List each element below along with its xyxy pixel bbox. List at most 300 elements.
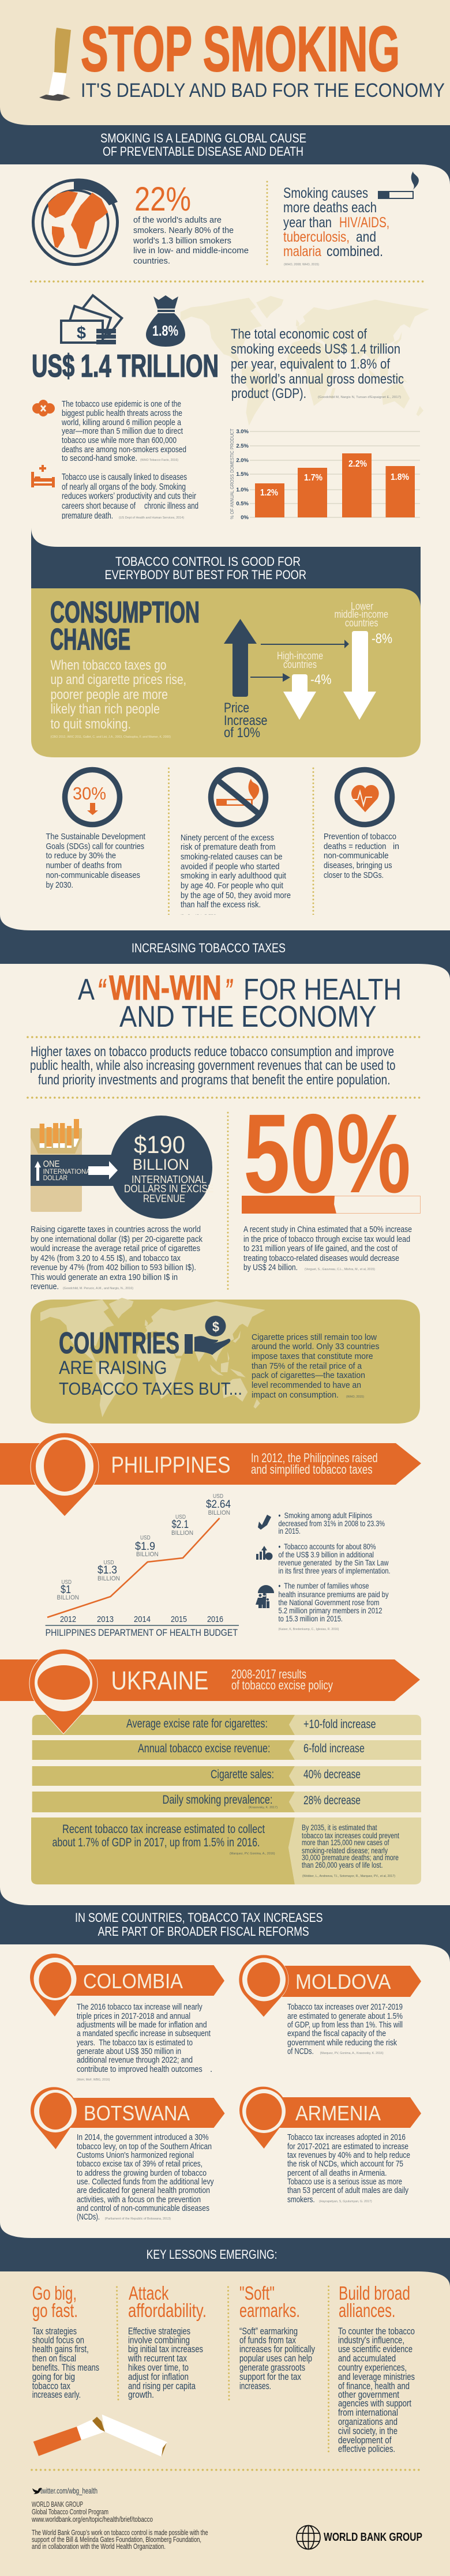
header panel — [0, 0, 450, 231]
lesson: build broad alliances: development of — [338, 2435, 392, 2446]
text block: total economic cost: product (GDP). — [231, 386, 306, 401]
icon: hand with coin: $ — [212, 1319, 220, 1335]
ribbon: botswana — [31, 2087, 224, 2149]
text: botswana: activities, with a focus on the prevention — [77, 2195, 201, 2205]
arrow: high income drop — [283, 674, 316, 720]
stat: 22 percent: 22% — [134, 181, 191, 218]
row: excise rate: +10-fold increase — [303, 1718, 376, 1731]
lesson: go big go fast: tobacco tax — [32, 2381, 71, 2391]
row: excise rate — [32, 1715, 421, 1735]
lesson: attack affordability: involve combining — [128, 2335, 190, 2345]
$190 billion label: INTERNATIONAL — [132, 1174, 207, 1185]
logo: world bank group: WORLD BANK GROUP — [324, 2531, 422, 2544]
text: ninety percent: smoking-related causes can be — [181, 852, 283, 862]
icon: broken cigarette — [33, 2414, 167, 2457]
text block: diseases: reduces workers’ productivity and cuts their — [62, 491, 197, 501]
progress bar: 50 percent — [242, 1196, 420, 1214]
row: gdp and estimates: Recent tobacco tax increase estimated to collect — [62, 1823, 265, 1836]
banner: broader fiscal reforms — [0, 1887, 450, 1962]
years axis: 2015 — [171, 1614, 187, 1624]
label 2013: BILLION — [97, 1575, 120, 1582]
body text: than 75% of the retail price of a — [252, 1361, 362, 1371]
body text: to quit smoking. — [51, 716, 131, 732]
text: moldova: government while reducing the risk — [287, 2038, 397, 2048]
label 2016: BILLION — [208, 1509, 230, 1516]
lesson: attack affordability — [127, 2282, 207, 2400]
one international dollar: DOLLAR — [43, 1174, 68, 1182]
lesson: attack affordability: Attack — [129, 2282, 169, 2304]
banner: key lessons — [0, 2222, 450, 2576]
lesson: attack affordability: big initial tax increases — [128, 2344, 203, 2355]
text: ninety percent: by the age of 50, they avoid more — [181, 891, 291, 900]
text: botswana: Customs Union's harmonized regional — [77, 2150, 194, 2160]
ribbon: moldova — [239, 1955, 421, 2017]
label: -4%: -4% — [310, 672, 331, 688]
lesson: go big go fast: then on fiscal — [32, 2353, 76, 2364]
text: china study: (Verguet, S., Gauvreau, C.L., Mishra, M., et al, 2015) — [305, 1268, 375, 1271]
text: prevention: in — [393, 842, 399, 851]
text: ninety percent: Ninety percent of the excess — [181, 833, 274, 843]
text block: adult smokers: of the world's adults are — [133, 215, 222, 225]
text: colombia — [77, 2002, 212, 2082]
subheading — [59, 1357, 242, 1399]
lesson: attack affordability: with recurrent tax — [127, 2353, 187, 2364]
arrow: to lower middle income — [261, 640, 349, 648]
lesson: go big go fast — [32, 2282, 99, 2400]
icon: growth chart with coin — [256, 1546, 272, 1560]
icon: cigarette butt — [39, 28, 71, 101]
icon: family under umbrella — [256, 1585, 274, 1608]
ribbon: armenia: ARMENIA — [295, 2101, 381, 2125]
text: tobacco accounts: in its first three years of implementation. — [278, 1567, 390, 1575]
lesson: go big go fast: Go big, — [32, 2282, 77, 2304]
bar low income — [255, 483, 284, 517]
text: prevention: deaths = reduction — [324, 842, 387, 851]
text: armenia: tax revenues by 40% and to help reduce — [287, 2150, 410, 2160]
text block: total economic cost: smoking exceeds US$ 1.4 trillion — [231, 341, 400, 357]
text: colombia: (MoH, MoF, WBG, 2016) — [77, 2078, 110, 2082]
icon: hand with cigarette — [258, 1515, 271, 1530]
text: armenia: (Hayrapetyan, S, Gyulumyan, G. 2017) — [319, 2200, 372, 2203]
text: tobacco accounts: • Tobacco accounts for about 80% — [278, 1542, 376, 1551]
text: tobacco accounts — [278, 1542, 390, 1575]
text: ninety percent: avoided if people who started — [181, 862, 279, 872]
text block: epidemic: tobacco use while more than 600,000 — [62, 435, 177, 445]
icon: money bills — [61, 295, 122, 344]
heading: COUNTRIES — [59, 1327, 179, 1360]
banner: key lessons: KEY LESSONS EMERGING: — [147, 2247, 277, 2262]
lesson: go big go fast: increases early. — [32, 2390, 81, 2400]
lesson: soft earmarks — [239, 2282, 316, 2391]
category labels: Low-Income — [255, 521, 284, 528]
heading — [105, 554, 306, 582]
text: colombia: The 2016 tobacco tax increase will nearly — [77, 2002, 202, 2012]
pin — [31, 2087, 77, 2149]
category labels: Countries — [298, 532, 321, 539]
label 2015: $2.1 — [172, 1519, 189, 1531]
label 2013 — [97, 1560, 120, 1582]
years axis — [60, 1614, 223, 1624]
lesson: soft earmarks: generate grassroots — [239, 2363, 305, 2373]
text block: epidemic: to second-hand smoke. — [62, 453, 137, 463]
bar lower middle income — [298, 468, 327, 517]
body text: pack of cigarettes—the taxation — [252, 1370, 365, 1380]
text: raising cigarette taxes — [30, 1225, 202, 1291]
arrow — [88, 1161, 118, 1180]
icon: cigarette pack with $190 billion — [31, 1116, 213, 1219]
text: organisation address — [31, 2500, 153, 2524]
label 2013: USD — [104, 1560, 114, 1566]
text: acknowledgement: The World Bank Group’s work on tobacco control is made possible with the — [32, 2529, 208, 2537]
text: prevention — [324, 832, 399, 880]
text: acknowledgement: and in collaboration with the World Health Organization. — [32, 2543, 166, 2551]
bar low income: 1.2% — [260, 488, 278, 498]
text: colombia: years. The tobacco tax is estimated to — [77, 2038, 193, 2048]
text block: diseases: chronic illness and — [144, 501, 198, 511]
body text: When tobacco taxes go — [51, 658, 166, 673]
icon: money bag 1.8%: 1.8% — [152, 323, 178, 339]
ribbon: colombia: COLOMBIA — [83, 1969, 183, 1993]
background world map — [181, 296, 429, 426]
text: armenia: for 2017-2021 are estimated to increase — [287, 2142, 408, 2151]
label 2015: USD — [175, 1514, 186, 1520]
lesson: soft earmarks: of funds from tax — [239, 2335, 297, 2345]
label 2014 — [135, 1535, 159, 1558]
text: higher taxes — [30, 1044, 396, 1088]
text: organisation address: WORLD BANK GROUP — [32, 2500, 83, 2509]
text: moldova — [287, 2002, 403, 2056]
lesson: build broad alliances: use scientific evidence — [338, 2344, 412, 2355]
section heading: leading global cause — [100, 131, 306, 159]
body text: Cigarette prices still remain too low — [252, 1332, 377, 1342]
text: china study: in the price of tobacco through excise tax would lead — [243, 1234, 410, 1244]
icon: heart circle — [337, 769, 392, 825]
heading — [50, 596, 200, 656]
label: lower middle income countries: middle-income — [335, 609, 388, 620]
text block: epidemic: year—more than 5 million due to direct — [62, 426, 183, 436]
row: excise rate: Average excise rate for cigarettes: — [126, 1717, 268, 1730]
text: armenia: the risk of NCDs, which account for 75 — [287, 2159, 403, 2169]
text: sustainable development goals: number of deaths from — [46, 861, 122, 870]
text: acknowledgement — [32, 2529, 208, 2551]
text block: adult smokers: smokers. Nearly 80% of the — [133, 226, 234, 235]
row: gdp and estimates: more than 125,000 new cases of — [302, 1838, 389, 1847]
category labels: High-Income — [342, 522, 373, 529]
text: health insurance: the National Government rose from — [278, 1598, 380, 1607]
text block: total economic cost: per year, equivalent to 1.8% of — [231, 356, 390, 372]
text: armenia: smokers. — [287, 2195, 315, 2205]
lesson: go big go fast: go fast. — [32, 2300, 78, 2321]
row: gdp and estimates: tobacco tax increases could prevent — [302, 1831, 399, 1840]
lesson: attack affordability: adjust for inflation — [128, 2372, 189, 2382]
text block: more deaths: year than — [283, 215, 332, 231]
$190 billion label: REVENUE — [143, 1193, 185, 1204]
text block: adult smokers: world's 1.3 billion smokers — [133, 236, 231, 246]
text: colombia: generate about US$ 350 million in — [77, 2046, 181, 2056]
lesson: soft earmarks: support for the tax — [239, 2372, 302, 2382]
icon: hospital bed — [31, 465, 55, 487]
icon: cloud with x — [32, 400, 55, 416]
text: botswana: use. Collected funds from the additional levy — [77, 2177, 214, 2187]
text: prevention: non-communicable — [324, 851, 389, 861]
$190 billion label: DOLLARS IN EXCISE — [124, 1183, 213, 1195]
lesson: soft earmarks: “Soft” earmarking — [239, 2326, 298, 2337]
source: (WHO, 2008; WHO, 2015) — [284, 263, 319, 266]
text: sustainable development goals: by 2030. — [46, 880, 73, 890]
text block: more deaths: Smoking causes — [283, 185, 368, 201]
text: ninety percent: than half the excess risk. — [181, 900, 261, 910]
row: gdp and estimates: smoking-related disease; nearly — [302, 1846, 388, 1855]
text block: diseases: (US Dept of Health and Human Services, 2014) — [119, 516, 184, 520]
category labels: World — [393, 521, 407, 528]
row: prevalence — [32, 1792, 421, 1812]
arrow: price up — [224, 619, 257, 697]
lesson: build broad alliances: agencies with support — [338, 2398, 411, 2409]
text: sustainable development goals: to reduce by 30% the — [46, 851, 116, 861]
row: gdp and estimates: (Marquez, PV, Gonima, A., 2016) — [230, 1852, 275, 1856]
price increase label: Price — [224, 700, 249, 716]
body text: (CBO 2012, IARC 2011, Gallet, C. and List, J.A., 2003, Chaloupka, F. and Warner, K. 2000) — [51, 735, 171, 739]
body text: (WHO, 2015) — [346, 1395, 364, 1399]
lesson: build broad alliances: other government — [338, 2390, 399, 2400]
price increase label — [224, 700, 268, 741]
label: lower middle income countries — [335, 600, 388, 629]
text block: adult smokers — [133, 215, 249, 266]
$190 billion label: BILLION — [133, 1156, 189, 1173]
text: botswana: and control of non-communicable diseases — [77, 2203, 209, 2213]
stat: US$ 1.4 trillion: US$ 1.4 TRILLION — [32, 348, 219, 384]
text: ninety percent: smoking in early adulthood quit — [181, 871, 287, 881]
label: lower middle income countries: Lower — [351, 600, 373, 612]
category labels: Countries — [342, 527, 366, 534]
text block: more deaths: and — [356, 229, 376, 245]
label 2014: $1.9 — [135, 1541, 155, 1553]
row: gdp and estimates: about 1.7% of GDP in 2017, up from 1.5% in 2016. — [52, 1836, 260, 1849]
bar world — [385, 466, 415, 517]
label 2012: BILLION — [57, 1594, 79, 1601]
heading: win-win: WIN-WIN — [109, 968, 222, 1007]
panel: tobacco control banner — [31, 519, 421, 609]
icon: money bills: $ — [77, 324, 86, 343]
text block: diseases — [62, 472, 198, 521]
ribbon: philippines — [0, 1433, 421, 1516]
text: raising cigarette taxes: revenue by 47% (from 402 billion to 593 billion I$). — [31, 1263, 196, 1272]
text: ninety percent — [181, 833, 291, 918]
one international dollar: INTERNATIONAL — [43, 1167, 94, 1176]
subheading — [231, 1667, 333, 1692]
section heading: leading global cause: SMOKING IS A LEADING GLOBAL CAUSE — [100, 131, 306, 145]
text: moldova: expand the fiscal capacity of the — [287, 2029, 386, 2038]
text: health insurance: to 15.3 million in 2015. — [278, 1614, 343, 1623]
heading: win-win: “ — [97, 973, 107, 1007]
lesson: soft earmarks: increases. — [239, 2381, 271, 2391]
years axis: 2013 — [97, 1614, 114, 1624]
lesson: build broad alliances: and accumulated — [338, 2353, 396, 2364]
text: prevention: diseases, bringing us — [324, 861, 392, 870]
lesson: build broad alliances: from international — [338, 2408, 398, 2418]
subheading: In 2012, the Philippines raised — [251, 1451, 378, 1465]
icon: cigarette with smoke — [378, 171, 419, 199]
text block: total economic cost: the world’s annual gross domestic — [231, 371, 404, 387]
heading: TOBACCO CONTROL IS GOOD FOR — [115, 554, 301, 569]
bar chart: cost as percent of GDP — [230, 429, 420, 539]
lesson: build broad alliances: country experiences, — [338, 2363, 407, 2373]
text block: more deaths: combined. — [327, 243, 383, 260]
text: twitter link: twitter.com/wbg_health — [40, 2486, 97, 2495]
lesson: build broad alliances: alliances. — [339, 2300, 396, 2321]
text: ninety percent: risk of premature death from — [181, 842, 276, 852]
body text — [51, 658, 186, 739]
label 2014: BILLION — [136, 1551, 159, 1558]
label: high income countries: countries — [283, 659, 317, 670]
text: botswana — [77, 2132, 214, 2222]
panel: countries raising taxes — [31, 1298, 420, 1424]
row: excise revenue: Annual tobacco excise revenue: — [138, 1742, 270, 1755]
row: gdp and estimates — [31, 1818, 421, 1884]
ribbon: ukraine — [0, 1659, 420, 1701]
text: smoking among filipinos: decreased from 31% in 2008 to 23.3% — [278, 1519, 385, 1528]
text: organisation address: www.worldbank.org/en/topic/health/brief/tobacco — [31, 2515, 153, 2524]
text: botswana: tobacco levy, on top of the Southern African — [77, 2142, 212, 2151]
lesson: build broad alliances: effective policies. — [338, 2444, 395, 2454]
text: raising cigarette taxes: Raising cigarette taxes in countries across the world — [31, 1225, 201, 1234]
text block: diseases: Tobacco use is causally linked to diseases — [62, 472, 187, 482]
text block: epidemic — [61, 399, 186, 463]
text: armenia: Tobacco use is a serious issue as more — [287, 2177, 402, 2187]
text block: total economic cost: The total economic cost of — [231, 326, 367, 342]
label 2016: $2.64 — [206, 1499, 231, 1511]
bar chart: cost as percent of GDP: 1.5% — [236, 471, 249, 478]
subheading: TOBACCO TAXES BUT... — [59, 1379, 242, 1399]
icon: 30 percent circle: 30% — [73, 783, 106, 803]
label 2016: USD — [213, 1493, 223, 1500]
price increase label: of 10% — [224, 725, 260, 741]
text: health insurance: (Kaiser, K, Bredenkamp, C., Iglesias, R. 2016) — [278, 1628, 339, 1631]
text: colombia: . — [210, 2064, 212, 2074]
text: china study: by US$ 24 billion. — [243, 1263, 298, 1272]
arrow: lower middle income drop — [343, 631, 376, 720]
text block: total economic cost: (Goodchild M, Nargis N, Tursan d'Espaignet E., 2017) — [318, 396, 401, 399]
ribbon: colombia — [30, 1954, 224, 2017]
row: excise revenue — [32, 1740, 421, 1760]
text: prevention: closer to the SDGs. — [324, 870, 384, 880]
text block: more deaths: HIV/AIDS, — [339, 215, 389, 231]
label 2014: USD — [140, 1535, 151, 1541]
text: botswana: (NCDs). — [77, 2212, 100, 2222]
body text: impact on consumption. — [252, 1390, 339, 1400]
text: botswana: to address the growing burden of tobacco — [77, 2168, 207, 2178]
banner: broader fiscal reforms: ARE PART OF BROADER FISCAL REFORMS — [98, 1924, 309, 1939]
body text: poorer people are more — [51, 687, 168, 703]
text: colombia: additional revenue through 2022; and — [77, 2055, 193, 2065]
lesson: soft earmarks: increases for politically — [239, 2344, 316, 2355]
heading: CONSUMPTION — [50, 596, 200, 629]
bar chart: cost as percent of GDP: 3.0% — [236, 429, 249, 435]
y axis title: % OF ANNUAL GROSS DOMESTIC PRODUCT — [230, 429, 235, 519]
lesson: go big go fast: should focus on — [32, 2335, 84, 2345]
row: cigarette sales: 40% decrease — [303, 1768, 361, 1781]
text block: diseases: premature death. — [62, 511, 113, 521]
bar chart: cost as percent of GDP: 0.5% — [236, 501, 249, 507]
bar chart: cost as percent of GDP: 2.5% — [236, 443, 249, 449]
row: gdp and estimates: than 260,000 years of life lost. — [302, 1861, 383, 1869]
text: armenia — [287, 2132, 410, 2205]
logo: world bank group — [297, 2525, 422, 2549]
text: organisation address: Global Tobacco Control Program — [32, 2508, 108, 2516]
lesson: build broad alliances: organizations and — [338, 2417, 397, 2427]
ribbon: armenia — [239, 2087, 421, 2149]
bar chart: cost as percent of GDP: 1.0% — [236, 487, 249, 493]
row: prevalence: 28% decrease — [303, 1794, 361, 1807]
category labels: Middle-Income — [298, 527, 333, 534]
lesson: soft earmarks: popular uses can help — [239, 2353, 312, 2364]
text: armenia: Tobacco tax increases adopted in 2016 — [287, 2132, 406, 2142]
text block: epidemic: biggest public health threats across the — [62, 408, 182, 418]
row: prevalence: Daily smoking prevalence: — [163, 1793, 272, 1807]
text: raising cigarette taxes: This would generate an extra 190 billion I$ in — [31, 1272, 178, 1282]
table: ukraine results — [31, 1715, 421, 1884]
text block: epidemic: The tobacco use epidemic is one of the — [62, 399, 181, 409]
lesson: build broad alliances: of finance, health and — [338, 2381, 410, 2391]
text: colombia: triple prices in 2017-2018 and annual — [77, 2011, 190, 2021]
text block: epidemic: deaths are among non-smokers exposed — [62, 445, 186, 455]
body text: up and cigarette prices rise, — [51, 672, 186, 688]
text: china study: treating tobacco-related diseases would decrease — [243, 1253, 399, 1263]
text block: adult smokers: live in low- and middle-income — [133, 246, 249, 256]
text: health insurance: health insurance premiums are paid by — [278, 1590, 389, 1599]
text: china study — [243, 1225, 412, 1272]
lesson: go big go fast: health gains first, — [32, 2344, 89, 2355]
bar high income: 2.2% — [348, 459, 367, 469]
text: sustainable development goals: Goals (SDGs) call for countries — [46, 842, 144, 851]
text: health insurance: 5.2 million primary members in 2012 — [278, 1606, 382, 1615]
lesson: attack affordability: growth. — [128, 2390, 154, 2400]
label 2012: $1 — [61, 1584, 71, 1596]
lesson: attack affordability: hikes over time, to — [128, 2363, 189, 2373]
bar lower middle income: 1.7% — [304, 473, 322, 483]
text: raising cigarette taxes: by one international dollar (I$) per 20-cigarette pack — [31, 1234, 202, 1244]
icon: ukraine map pin — [29, 1649, 97, 1734]
lesson: build broad alliances: To counter the tobacco — [338, 2326, 415, 2337]
banner: broader fiscal reforms: IN SOME COUNTRIES, TOBACCO TAX INCREASES — [75, 1910, 323, 1925]
text: raising cigarette taxes: by 42% (from 3.20 to 4.55 I$), and tobacco tax — [31, 1253, 181, 1263]
body text: likely than rich people — [51, 701, 160, 717]
label: -8%: -8% — [372, 631, 392, 647]
panel: consumption change — [31, 588, 421, 757]
text: smoking among filipinos — [278, 1511, 385, 1535]
text: colombia: a mandated specific increase in subsequent — [77, 2029, 211, 2038]
subheading: of tobacco excise policy — [231, 1678, 333, 1692]
bar chart: cost as percent of GDP: 0% — [241, 515, 249, 521]
years axis: 2012 — [60, 1614, 76, 1624]
heading: win-win: FOR HEALTH — [243, 973, 402, 1007]
category labels — [255, 521, 407, 539]
text: armenia: than 53 percent of adult males are daily — [287, 2186, 408, 2195]
chart caption: PHILIPPINES DEPARTMENT OF HEALTH BUDGET — [46, 1627, 238, 1638]
text: moldova: Tobacco tax increases over 2017-2019 — [287, 2002, 403, 2012]
text: health insurance — [278, 1582, 389, 1631]
label 2016 — [206, 1493, 231, 1516]
icon: twitter bird — [32, 2488, 42, 2494]
text: ninety percent: (Jha, P. and Peto, R, 2014) — [181, 914, 216, 918]
lesson: attack affordability: Effective strategies — [128, 2326, 190, 2337]
pin — [239, 1955, 288, 2017]
row: gdp and estimates: 30,000 premature deaths; and more — [302, 1853, 399, 1862]
text: smoking among filipinos: • Smoking among adult Filipinos — [278, 1511, 372, 1520]
row: excise revenue: 6-fold increase — [303, 1742, 365, 1755]
text: botswana: tobacco excise tax of 39% of retail prices, — [77, 2159, 202, 2169]
banner: increasing tobacco taxes: INCREASING TOBACCO TAXES — [132, 941, 286, 955]
